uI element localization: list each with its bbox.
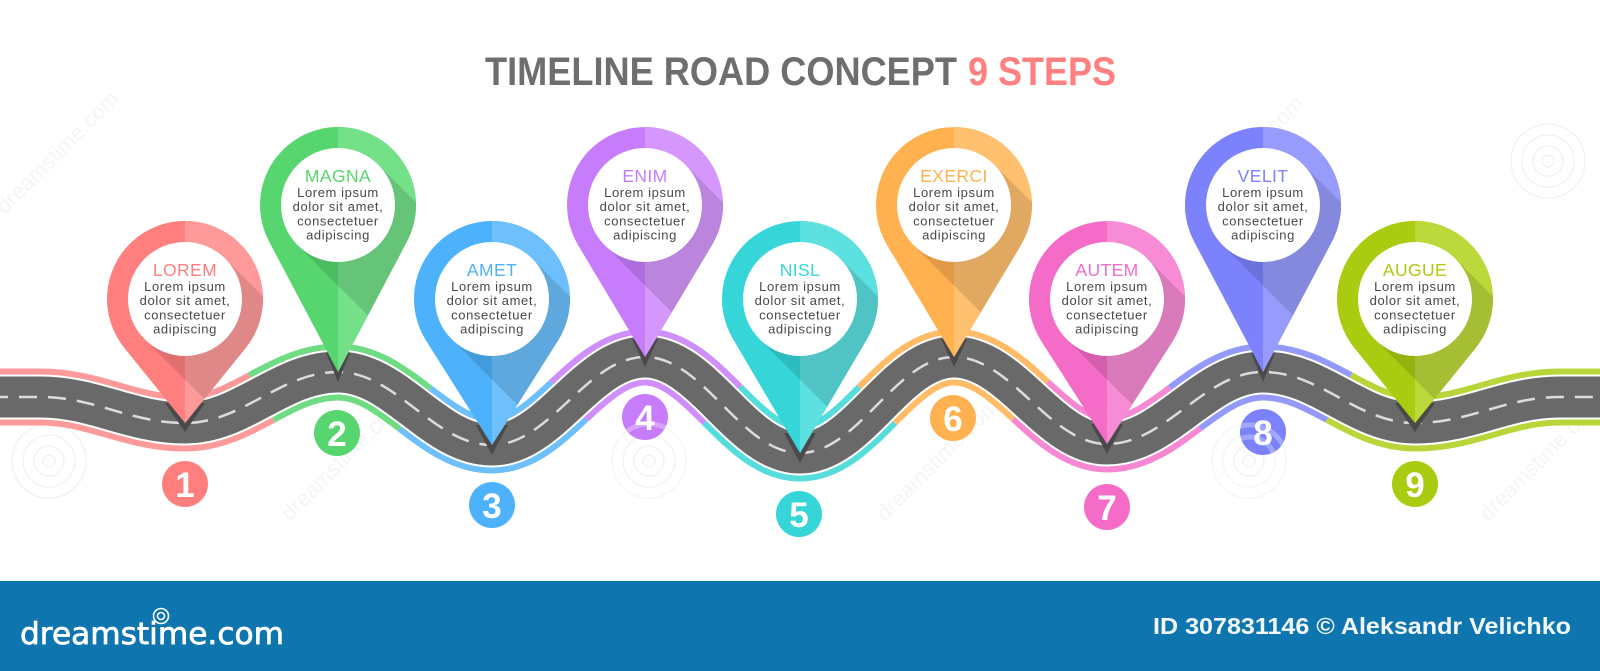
pin shadow band — [145, 259, 263, 399]
pin 5: NISL — [722, 221, 878, 453]
pin shadow band — [1375, 260, 1493, 399]
pin heading: AUGUE — [1383, 260, 1447, 280]
pin shadow band — [298, 166, 416, 315]
pin body — [567, 127, 723, 357]
pin heading: AUTEM — [1075, 260, 1139, 280]
pin shadow band — [914, 165, 1032, 312]
number badge 9 — [1392, 461, 1438, 507]
pin light half — [492, 221, 570, 445]
pin text: adipiscing — [613, 228, 677, 242]
number badge 9: 9 — [1405, 466, 1425, 505]
road edge: step 6 — [877, 357, 1030, 405]
pin text: adipiscing — [460, 322, 524, 336]
pin heading: MAGNA — [305, 166, 371, 186]
pin text: dolor sit amet, — [600, 199, 690, 214]
pin text: adipiscing — [153, 322, 217, 336]
logo spiral icon — [154, 608, 168, 624]
pin 2: MAGNA — [260, 127, 416, 372]
pin shadow band — [605, 165, 723, 312]
road edge: step 1 — [0, 397, 262, 423]
inner circle — [281, 148, 395, 262]
road with coloured edges — [0, 357, 1600, 453]
watermark overlay on badges — [612, 424, 1287, 499]
pin heading: ENIM — [622, 166, 668, 186]
white road border — [0, 357, 1600, 453]
number badge 8 — [1240, 409, 1286, 455]
pin shadow band — [1067, 259, 1185, 404]
pin text: Lorem ipsum — [297, 185, 379, 200]
road edge: step 8 — [1185, 372, 1339, 408]
pin text: adipiscing — [1231, 228, 1295, 242]
pin text: adipiscing — [1383, 322, 1447, 336]
pin shadow band — [760, 259, 878, 406]
pin text: consectetuer — [1222, 214, 1304, 228]
number badge 4: 4 — [635, 399, 655, 438]
number badge 6 — [930, 395, 976, 441]
pin text: consectetuer — [144, 308, 226, 322]
pin text: Lorem ipsum — [451, 279, 533, 294]
pin body — [260, 127, 416, 372]
pin light half — [1263, 127, 1341, 372]
number badge 1: 1 — [175, 466, 195, 505]
pin 8: VELIT — [1185, 127, 1341, 372]
pin text: dolor sit amet, — [1062, 293, 1152, 308]
pin text: dolor sit amet, — [140, 293, 230, 308]
inner circle — [1206, 148, 1320, 262]
pin heading: LOREM — [153, 260, 217, 280]
pin light half — [954, 127, 1032, 357]
number badge 2 — [314, 410, 360, 456]
pin text: adipiscing — [1075, 322, 1139, 336]
pin text: consectetuer — [297, 214, 379, 228]
pin text: dolor sit amet, — [755, 293, 845, 308]
asphalt — [0, 357, 1600, 453]
number badge 5: 5 — [789, 496, 809, 535]
pin body — [1185, 127, 1341, 372]
pin text: adipiscing — [768, 322, 832, 336]
pin text: dolor sit amet, — [909, 199, 999, 214]
pin 4: ENIM — [567, 127, 723, 357]
inner circle — [1358, 242, 1472, 356]
number badge 5 — [776, 491, 822, 537]
pin text: dolor sit amet, — [293, 199, 383, 214]
number badge 2: 2 — [327, 415, 347, 454]
road edge: step 5 — [722, 405, 877, 453]
pin text: Lorem ipsum — [913, 185, 995, 200]
number badge 8: 8 — [1253, 414, 1273, 453]
pin heading: EXERCI — [920, 166, 988, 186]
inner circle — [1050, 242, 1164, 356]
inner circle — [897, 148, 1011, 262]
pin text: Lorem ipsum — [144, 279, 226, 294]
pin heading: NISL — [780, 260, 820, 280]
pin text: dolor sit amet, — [447, 293, 537, 308]
pin text: dolor sit amet, — [1218, 199, 1308, 214]
number badge 1 — [162, 461, 208, 507]
pin text: dolor sit amet, — [1370, 293, 1460, 308]
pin text: Lorem ipsum — [1222, 185, 1304, 200]
pin light half — [800, 221, 878, 453]
pin text: consectetuer — [759, 308, 841, 322]
pin text: consectetuer — [604, 214, 686, 228]
pin body — [722, 221, 878, 453]
pin light half — [185, 221, 263, 423]
number badge 3 — [469, 482, 515, 528]
pin text: consectetuer — [451, 308, 533, 322]
image credit: ID 307831146 © Aleksandr Velichko — [1153, 613, 1571, 639]
inner circle — [128, 242, 242, 356]
number badge 6: 6 — [943, 400, 963, 439]
watermark text — [0, 86, 1600, 526]
pin text: Lorem ipsum — [1066, 279, 1148, 294]
pin light half — [645, 127, 723, 357]
pin 3: AMET — [414, 221, 570, 445]
pin text: Lorem ipsum — [604, 185, 686, 200]
pin text: consectetuer — [913, 214, 995, 228]
centre dashes — [0, 357, 1600, 453]
pin 6: EXERCI — [876, 127, 1032, 357]
pin 9: AUGUE — [1337, 220, 1493, 423]
pin text: adipiscing — [922, 228, 986, 242]
pin 7: AUTEM — [1029, 221, 1186, 444]
number badge 4 — [622, 394, 668, 440]
number badge 7 — [1084, 484, 1130, 530]
watermark text: dreamstime.com — [276, 393, 409, 526]
pin text: consectetuer — [1374, 308, 1456, 322]
dreamstime logo text: dreamstime.com — [20, 617, 284, 652]
watermark text: dreamstime.com — [871, 393, 1004, 526]
pin body — [107, 221, 263, 423]
watermark text: dreamstime.com — [1176, 91, 1309, 224]
pin text: Lorem ipsum — [759, 279, 841, 294]
pin body — [1029, 221, 1185, 444]
pin body — [1337, 221, 1493, 423]
inner circle — [588, 148, 702, 262]
pin text: Lorem ipsum — [1374, 279, 1456, 294]
pin text: consectetuer — [1066, 308, 1148, 322]
pin light half — [338, 127, 416, 372]
pin shadow band — [1223, 165, 1341, 316]
inner circle — [435, 242, 549, 356]
title: 9 STEPS — [968, 50, 1116, 94]
footer bar — [0, 581, 1600, 671]
pin shadows on road — [165, 339, 1435, 463]
pin body — [414, 221, 570, 445]
road edge: step 7 — [1030, 400, 1185, 444]
pin light half — [1107, 221, 1185, 444]
road edge: step 4 — [568, 357, 722, 405]
number badge 7: 7 — [1097, 489, 1117, 528]
title: TIMELINE ROAD CONCEPT — [485, 50, 957, 94]
pin body — [876, 127, 1032, 357]
number badge 3: 3 — [482, 487, 502, 526]
watermark spirals — [12, 124, 1585, 498]
pin light half — [1415, 221, 1493, 423]
pin shadow band — [452, 259, 570, 405]
pin heading: AMET — [467, 260, 517, 280]
pin text: adipiscing — [306, 228, 370, 242]
road edge: step 3 — [415, 401, 568, 445]
inner circle — [743, 242, 857, 356]
pin heading: VELIT — [1238, 166, 1288, 186]
road edge: step 2 — [262, 372, 415, 408]
road edge: step 9 — [1339, 397, 1600, 423]
pin 1: LOREM — [107, 220, 263, 423]
